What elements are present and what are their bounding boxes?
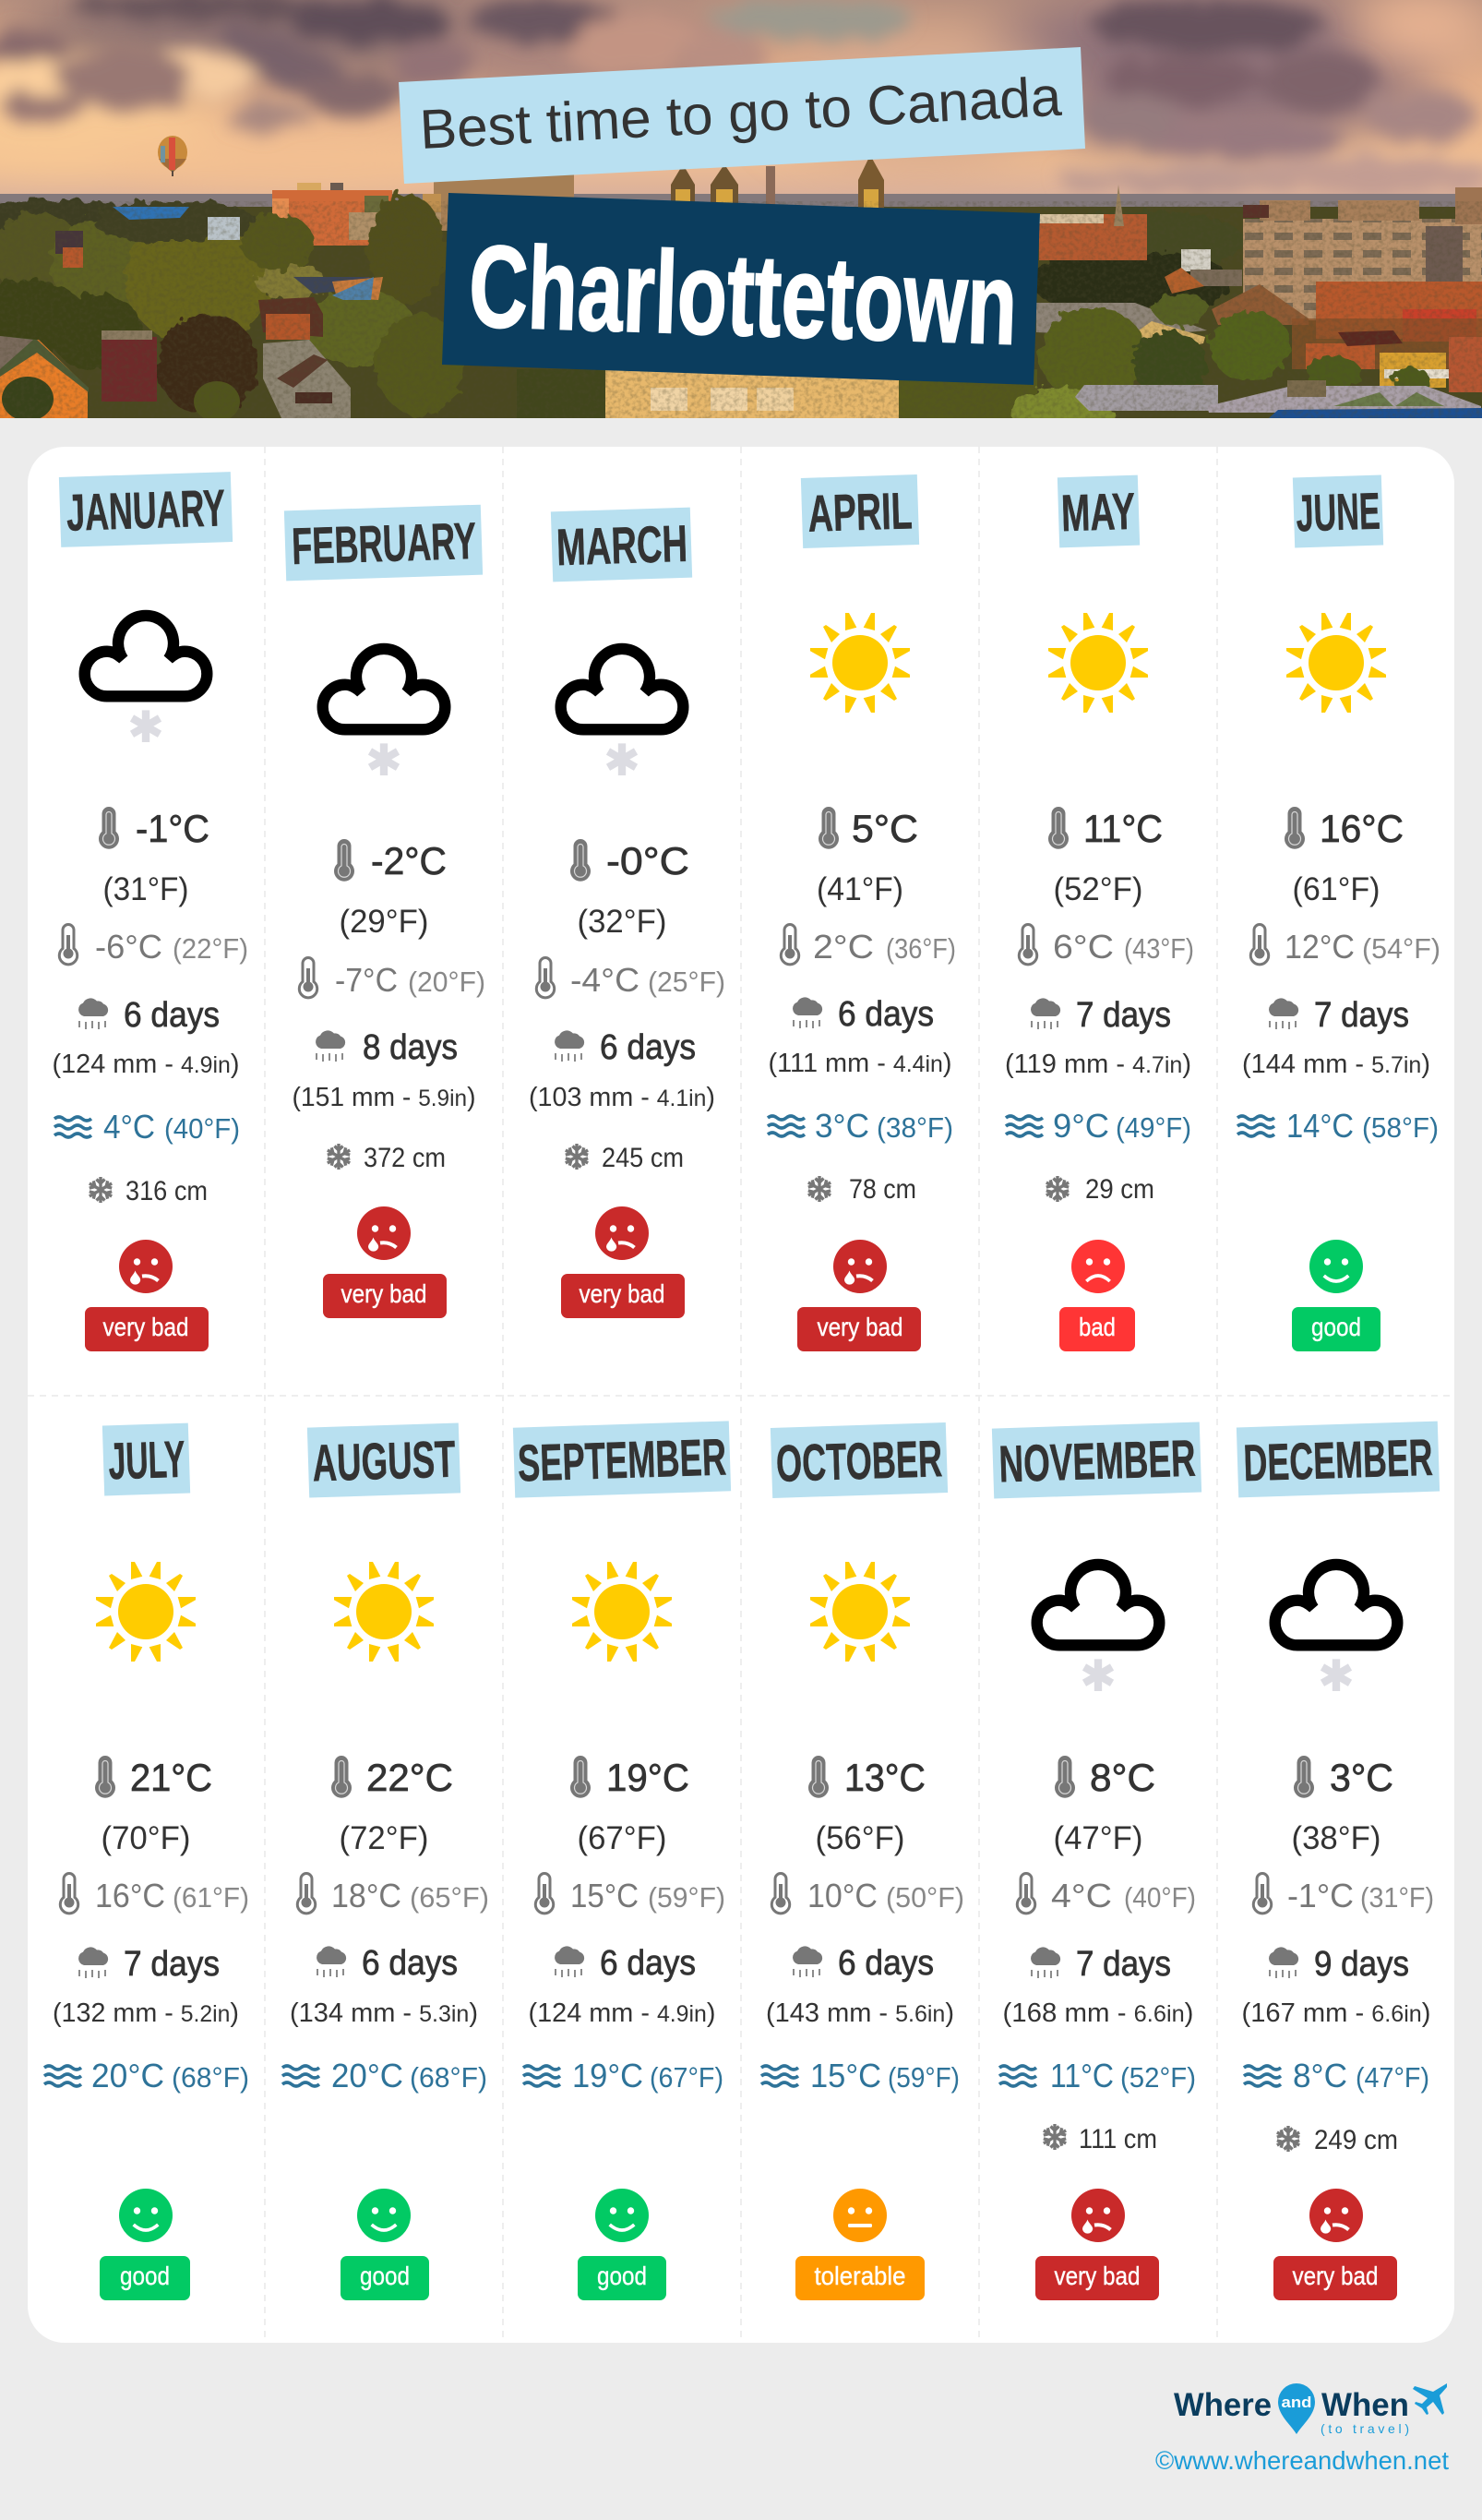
high temperature: (41°F) — [817, 871, 903, 907]
snowfall: 29 cm — [1085, 1174, 1154, 1205]
low temperature: (31°F) — [1360, 1881, 1434, 1914]
high temperature: 21°C — [130, 1756, 212, 1799]
rainfall — [766, 1944, 954, 2028]
rainfall: (124 mm - 4.9in) — [528, 1998, 716, 2028]
high temperature — [1048, 807, 1163, 907]
low temperature: -4°C — [570, 961, 639, 999]
high temperature: -1°C — [136, 807, 209, 850]
low temperature: -7°C — [335, 961, 398, 999]
low temperature: (22°F) — [173, 932, 248, 965]
high temperature: 11°C — [1083, 807, 1163, 850]
snowfall: 249 cm — [1314, 2125, 1398, 2155]
low temperature: 10°C — [807, 1877, 878, 1914]
rainfall: 6 days — [838, 995, 934, 1034]
rainfall: (151 mm - 5.9in) — [292, 1083, 476, 1112]
month label: November: NOVEMBER — [998, 1429, 1196, 1493]
rainfall: (111 mm - 4.4in) — [768, 1049, 952, 1078]
icon: sun — [334, 1562, 434, 1662]
month label: March — [551, 508, 692, 582]
month label: August — [307, 1422, 460, 1498]
rainfall: 8 days — [363, 1028, 458, 1067]
low temperature: -6°C — [95, 928, 162, 966]
blue roof — [113, 207, 189, 220]
church spires behind title — [671, 159, 884, 209]
high temperature: (67°F) — [578, 1820, 666, 1856]
snowfall — [1045, 1174, 1154, 1205]
icon: sun — [572, 1562, 672, 1662]
rainfall: 9 days — [1314, 1945, 1409, 1984]
month label: September: SEPTEMBER — [517, 1427, 727, 1493]
sea temperature: 3°C — [815, 1107, 869, 1145]
low temperature: (20°F) — [408, 966, 485, 998]
snowfall: 78 cm — [849, 1174, 916, 1205]
roofs and brick row right — [1036, 249, 1482, 392]
sea temperature: 15°C — [810, 2057, 881, 2094]
rainfall: (143 mm - 5.6in) — [766, 1998, 954, 2028]
month label: October: OCTOBER — [775, 1429, 943, 1493]
low temperature: (40°F) — [1124, 1881, 1196, 1914]
sea temperature: 20°C — [91, 2057, 164, 2094]
orange building — [272, 183, 441, 246]
icon: hot air balloon — [158, 136, 187, 176]
low temperature: 12°C — [1285, 928, 1355, 966]
snowfall: 111 cm — [1079, 2124, 1157, 2154]
snowfall — [807, 1174, 916, 1205]
high temperature: (56°F) — [816, 1820, 904, 1856]
rainfall: 7 days — [1314, 996, 1409, 1035]
snowfall — [326, 1143, 446, 1173]
high temperature — [1292, 1756, 1393, 1856]
panel: monthly climate table — [28, 447, 1454, 2343]
houses left — [0, 231, 383, 422]
trees lower right — [1011, 293, 1430, 418]
high temperature: (47°F) — [1054, 1820, 1142, 1856]
rating: bad — [1059, 1240, 1135, 1351]
high temperature: (32°F) — [578, 904, 666, 940]
high temperature: (31°F) — [103, 871, 188, 907]
low temperature: 16°C — [95, 1877, 165, 1914]
cell: November — [992, 1422, 1201, 2300]
rainfall: (119 mm - 4.7in) — [1005, 1050, 1191, 1079]
high temperature: 8°C — [1090, 1756, 1155, 1799]
logo: Where and When: Where — [1174, 2387, 1272, 2423]
rating: good — [578, 2189, 666, 2300]
city base — [0, 207, 1482, 421]
low temperature: -1°C — [1287, 1877, 1354, 1914]
high temperature: (29°F) — [340, 904, 428, 940]
cell: September — [513, 1421, 731, 2300]
rating: good — [341, 2189, 429, 2300]
month label: November — [992, 1422, 1201, 1499]
month label: January — [59, 472, 233, 547]
high temperature: -0°C — [606, 839, 689, 882]
high temperature — [817, 807, 918, 907]
sea temperature: 14°C — [1286, 1107, 1354, 1145]
icon: snow cloud — [561, 649, 683, 775]
icon: plane — [1413, 2383, 1447, 2415]
low temperature — [299, 958, 485, 999]
cell: June — [1237, 475, 1440, 1351]
month label: May — [1058, 475, 1140, 547]
rainfall — [1242, 1945, 1430, 2028]
high temperature: 3°C — [1330, 1756, 1393, 1799]
rating: good: good — [360, 2262, 410, 2290]
rainfall: 7 days — [124, 1945, 220, 1984]
header photo: Charlottetown skyline at sunset — [0, 0, 1482, 434]
rating: tolerable — [795, 2189, 925, 2300]
low temperature: 18°C — [331, 1877, 401, 1914]
low temperature — [1253, 1874, 1434, 1914]
rating: good: good — [597, 2262, 647, 2290]
cell: July — [44, 1423, 249, 2300]
rating: very bad — [1035, 2189, 1159, 2300]
high temperature: 5°C — [852, 807, 918, 850]
trees left — [0, 194, 464, 415]
rainfall: 7 days — [1076, 1945, 1171, 1984]
sea temperature — [44, 2057, 249, 2094]
sea temperature: 11°C — [1050, 2057, 1114, 2094]
sea temperature: (68°F) — [172, 2061, 249, 2094]
yellow building bottom centre — [517, 369, 1037, 420]
cell: February — [284, 505, 485, 1318]
sea temperature — [54, 1108, 240, 1146]
high temperature — [95, 1756, 212, 1856]
sea temperature — [523, 2057, 723, 2094]
high temperature: 16°C — [1320, 807, 1404, 850]
logo: Where and When — [1174, 2383, 1447, 2436]
sea temperature — [761, 2057, 960, 2094]
sea temperature: (40°F) — [164, 1112, 240, 1145]
rating: very bad: very bad — [580, 1279, 664, 1308]
month label: October — [771, 1422, 948, 1498]
icon: sun — [1286, 613, 1386, 713]
cell: March — [529, 508, 725, 1318]
rainfall — [528, 1944, 716, 2028]
rating: very bad: very bad — [103, 1313, 188, 1341]
rating: tolerable: tolerable — [814, 2262, 906, 2290]
cell: October — [761, 1422, 964, 2300]
rating: very bad: very bad — [1054, 2262, 1141, 2290]
low temperature — [536, 958, 725, 999]
sea temperature — [1237, 1107, 1439, 1145]
rainfall: (144 mm - 5.7in) — [1242, 1050, 1430, 1079]
rainfall — [1005, 996, 1191, 1079]
title banner: Best time to go to Canada: Best time to go to Canada — [418, 66, 1063, 161]
icon: snow cloud — [85, 616, 207, 742]
rainfall: (168 mm - 6.6in) — [1002, 1998, 1194, 2028]
high temperature: 22°C — [366, 1756, 453, 1799]
high temperature: (72°F) — [340, 1820, 428, 1856]
sea temperature: (49°F) — [1116, 1111, 1191, 1144]
month label: May: MAY — [1060, 482, 1136, 542]
low temperature — [1250, 925, 1440, 966]
low temperature — [771, 1874, 964, 1914]
icon: snow cloud — [1037, 1565, 1159, 1691]
sea temperature — [282, 2057, 487, 2094]
rainfall — [529, 1028, 715, 1112]
rainfall: (132 mm - 5.2in) — [53, 1998, 239, 2028]
high temperature — [570, 1756, 689, 1856]
month label: February — [284, 505, 483, 581]
month label: September — [513, 1421, 731, 1498]
high temperature: 13°C — [844, 1756, 926, 1799]
photo grain over city — [0, 201, 1482, 419]
cell: January — [52, 472, 248, 1351]
low temperature: 6°C — [1053, 928, 1114, 966]
high temperature — [334, 839, 447, 940]
logo: Where and When: When — [1321, 2387, 1409, 2423]
rating: good: good — [120, 2262, 170, 2290]
month label: April: APRIL — [807, 481, 913, 543]
snowfall — [564, 1143, 684, 1173]
sea temperature — [999, 2057, 1196, 2094]
sea temperature: 8°C — [1293, 2057, 1347, 2094]
month label: June: JUNE — [1296, 482, 1380, 542]
low temperature: (25°F) — [648, 966, 725, 998]
large beige building — [1243, 187, 1482, 320]
rainfall: (167 mm - 6.6in) — [1242, 1998, 1430, 2028]
rainfall: 6 days — [600, 1944, 696, 1983]
high temperature — [1285, 807, 1404, 907]
logo: Where and When: (to travel) — [1321, 2421, 1409, 2436]
icon: sun — [96, 1562, 196, 1662]
icon: snow cloud — [1275, 1565, 1397, 1691]
month label: August: AUGUST — [312, 1430, 456, 1492]
low temperature — [535, 1874, 725, 1914]
low temperature: (59°F) — [648, 1881, 725, 1914]
sea temperature: (52°F) — [1120, 2061, 1196, 2094]
cell: December — [1237, 1422, 1440, 2300]
low temperature: 2°C — [813, 928, 874, 966]
rainfall: (103 mm - 4.1in) — [529, 1083, 715, 1112]
rating: very bad — [797, 1240, 921, 1351]
high temperature — [808, 1756, 926, 1856]
rating: good — [100, 2189, 190, 2300]
website credit: ©www.whereandwhen.net — [1155, 2446, 1449, 2475]
cell: August — [282, 1422, 489, 2300]
title banner: Best time to go to Canada — [399, 47, 1085, 184]
rating: very bad — [1273, 2189, 1397, 2300]
low temperature: (36°F) — [886, 932, 956, 965]
rainfall — [1242, 996, 1430, 1079]
high temperature — [1054, 1756, 1155, 1856]
high temperature: (38°F) — [1292, 1820, 1380, 1856]
sea temperature: 4°C — [103, 1108, 155, 1146]
sea temperature: (68°F) — [410, 2061, 487, 2094]
rainfall — [292, 1028, 476, 1112]
icon: sun — [810, 1562, 910, 1662]
month label: January: JANUARY — [66, 478, 226, 542]
month label: February: FEBRUARY — [291, 511, 477, 575]
low temperature: (65°F) — [410, 1881, 489, 1914]
red brick church — [1039, 185, 1147, 260]
rating: very bad: very bad — [1292, 2262, 1379, 2290]
rainfall: 6 days — [838, 1944, 934, 1983]
high temperature: (70°F) — [102, 1820, 190, 1856]
city banner: Charlottetown: Charlottetown — [467, 221, 1019, 369]
high temperature — [331, 1756, 453, 1856]
rainfall: 6 days — [124, 996, 220, 1035]
rainfall — [53, 1945, 239, 2028]
icon: snow cloud — [323, 649, 445, 775]
rating: very bad: very bad — [341, 1279, 426, 1308]
high temperature: (61°F) — [1292, 871, 1380, 907]
sea temperature: (59°F) — [888, 2061, 960, 2094]
high temperature: 19°C — [606, 1756, 689, 1799]
brown block behind title — [434, 175, 574, 231]
month label: July: JULY — [108, 1430, 185, 1490]
sea temperature: (38°F) — [877, 1111, 953, 1144]
cell: May — [1005, 475, 1194, 1351]
high temperature: (52°F) — [1054, 871, 1142, 907]
high temperature — [99, 807, 209, 907]
sea temperature: 19°C — [572, 2057, 643, 2094]
low temperature — [781, 925, 956, 966]
sea temperature: 20°C — [331, 2057, 403, 2094]
icon: map pin — [1278, 2383, 1315, 2434]
rating: good — [1292, 1240, 1380, 1351]
snowfall: 316 cm — [125, 1176, 208, 1206]
rainfall — [290, 1944, 478, 2028]
rating: very bad — [561, 1206, 685, 1318]
rainfall: 6 days — [600, 1028, 696, 1067]
sea temperature — [768, 1107, 953, 1145]
sea temperature — [1006, 1107, 1191, 1145]
high temperature: -2°C — [371, 839, 447, 882]
sea temperature: 9°C — [1053, 1107, 1109, 1145]
low temperature: 15°C — [570, 1877, 639, 1914]
rainfall — [1002, 1945, 1194, 2028]
trees right — [1037, 249, 1230, 308]
snowfall — [88, 1176, 208, 1206]
snowfall — [1042, 2124, 1157, 2154]
icon: sun — [810, 613, 910, 713]
rating: very bad: very bad — [818, 1313, 902, 1341]
cell: April — [768, 474, 956, 1351]
rating: bad: bad — [1079, 1313, 1116, 1341]
icon: map pin: and — [1281, 2394, 1312, 2411]
rainfall: 7 days — [1076, 996, 1171, 1035]
city banner: Charlottetown — [442, 193, 1040, 385]
sea temperature: (58°F) — [1362, 1111, 1439, 1144]
rating: good: good — [1311, 1313, 1361, 1341]
sea temperature: (67°F) — [650, 2061, 723, 2094]
month label: March: MARCH — [556, 514, 688, 576]
snowfall: 372 cm — [364, 1143, 446, 1173]
rating: very bad — [323, 1206, 447, 1318]
low temperature: (54°F) — [1362, 932, 1440, 965]
low temperature: (43°F) — [1124, 932, 1194, 965]
month label: April — [801, 474, 919, 548]
low temperature: (50°F) — [886, 1881, 964, 1914]
low temperature — [1017, 1874, 1196, 1914]
low temperature: 4°C — [1051, 1877, 1112, 1914]
month label: July — [102, 1423, 190, 1495]
rainfall: 6 days — [362, 1944, 458, 1983]
snowfall: 245 cm — [602, 1143, 684, 1173]
low temperature — [1019, 925, 1194, 966]
high temperature — [570, 839, 689, 940]
icon: sun — [1048, 613, 1148, 713]
low temperature — [60, 1874, 249, 1914]
month label: June — [1293, 475, 1383, 547]
rainfall — [52, 996, 240, 1079]
rainfall: (124 mm - 4.9in) — [52, 1050, 240, 1079]
distant hills — [0, 194, 1455, 207]
sea temperature — [1244, 2057, 1429, 2094]
rainfall — [768, 995, 952, 1078]
low temperature: (61°F) — [173, 1881, 249, 1914]
rating: very bad — [85, 1240, 209, 1351]
sea temperature: (47°F) — [1356, 2061, 1429, 2094]
bottom roofs right — [1075, 380, 1482, 418]
low temperature — [297, 1874, 489, 1914]
snowfall — [1275, 2125, 1398, 2155]
low temperature — [59, 925, 248, 966]
rainfall: (134 mm - 5.3in) — [290, 1998, 478, 2028]
